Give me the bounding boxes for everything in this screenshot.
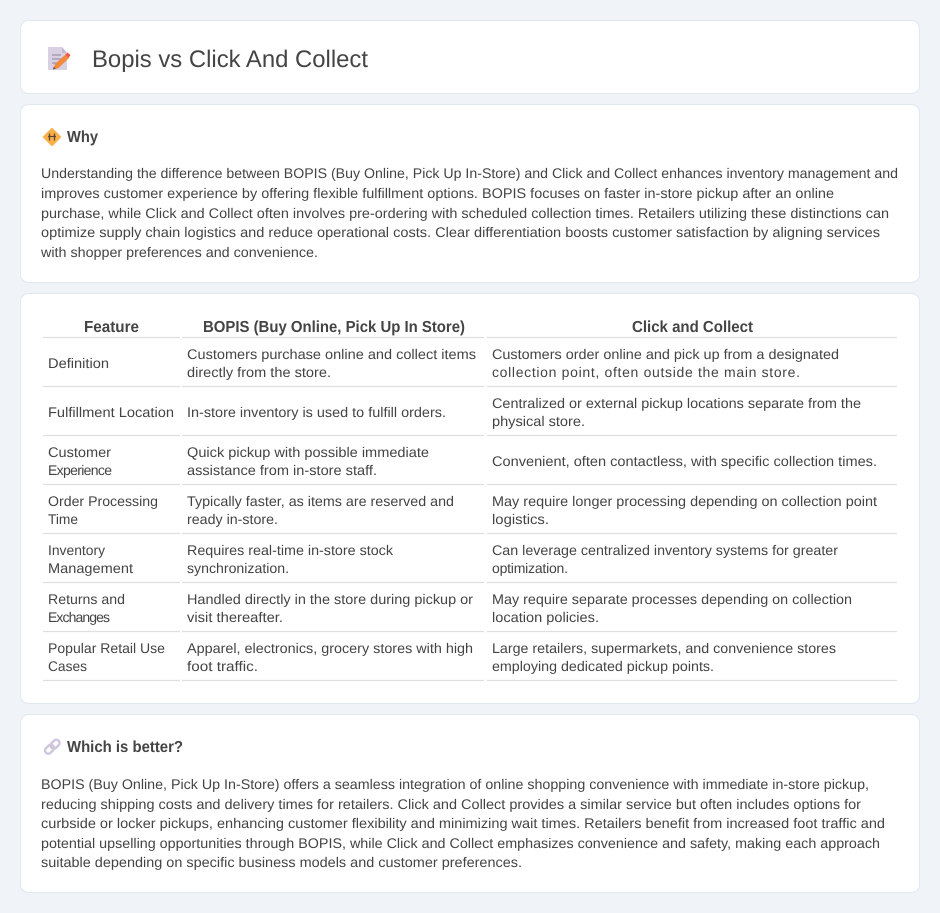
row: definition: collection point, often outside the main store. (492, 364, 800, 380)
row: definition: directly from the store. (187, 364, 331, 380)
row: inventory management: optimization. (492, 560, 568, 576)
row: inventory management (48, 542, 838, 576)
row: fulfillment location (48, 395, 861, 429)
row: definition: Customers purchase online and collect items (187, 346, 476, 362)
row: inventory management: Inventory (48, 542, 105, 558)
row: order processing time: May require longer processing depending on collection point (492, 493, 877, 509)
heading: why: Why (67, 129, 98, 146)
row: order processing time: Order Processing (48, 493, 158, 509)
row: definition: Definition (48, 355, 109, 371)
row: customer experience: Convenient, often contactless, with specific collection times. (492, 453, 877, 469)
text block: why paragraph: purchase, while Click and Collect often involves pre-ordering with scheduled collection times. Retailers utilizing these distinctions can (41, 205, 889, 221)
text block: which is better paragraph (41, 776, 885, 870)
row: order processing time: ready in-store. (187, 511, 278, 527)
row: order processing time: Typically faster, as items are reserved and (187, 493, 454, 509)
row: definition: Customers order online and pick up from a designated (492, 346, 839, 362)
text block: which is better paragraph: curbside or locker pickups, enhancing customer flexibility and minimizing wait times. Retailers benefit from increased foot traffic and (41, 815, 885, 831)
row: returns and exchanges (48, 591, 852, 625)
text block: why paragraph: optimize supply chain logistics and reduce operational costs. Clear differentiation boosts customer satisfaction by aligning services (41, 224, 880, 240)
text block: which is better paragraph: potential upselling opportunities through BOPIS, while Click and Collect emphasizes convenience and safety, making each approach (41, 835, 880, 851)
heading: which is better: Which is better? (67, 739, 183, 756)
row: returns and exchanges: visit thereafter. (187, 609, 283, 625)
text block: why paragraph: Understanding the difference between BOPIS (Buy Online, Pick Up In-Store) and Click and Collect enhances inventory management and (41, 165, 898, 181)
row: popular retail use cases: Popular Retail Use (48, 640, 165, 656)
text block: why paragraph: improves customer experience by offering flexible fulfillment options. BOPIS focuses on faster in-store pickup after an online (41, 185, 834, 201)
row: order processing time: Time (48, 511, 78, 527)
row: order processing time: logistics. (492, 511, 549, 527)
row: popular retail use cases: Cases (48, 658, 87, 674)
row: returns and exchanges: May require separate processes depending on collection (492, 591, 852, 607)
row: customer experience: Quick pickup with possible immediate (187, 444, 429, 460)
panel: header (20, 20, 920, 94)
row: fulfillment location: Centralized or external pickup locations separate from the (492, 395, 861, 411)
row: fulfillment location: In-store inventory is used to fulfill orders. (187, 404, 446, 420)
row: customer experience: assistance from in-store staff. (187, 462, 377, 478)
row: order processing time (48, 493, 877, 527)
row: inventory management: Management (48, 560, 133, 576)
text block: why paragraph (40, 165, 898, 260)
title: Bopis vs Click And Collect (92, 46, 368, 73)
panel: comparison table (20, 294, 920, 704)
row: inventory management: Requires real-time in-store stock (187, 542, 394, 558)
text block: why paragraph: with shopper preferences and convenience. (40, 244, 318, 260)
icon: link (44, 738, 61, 755)
text block: which is better paragraph: reducing shipping costs and delivery times for retailers. Click and Collect provides a similar service but often includes options for (41, 796, 861, 812)
row: customer experience: Experience (48, 462, 112, 478)
row: returns and exchanges: location policies. (492, 609, 599, 625)
row: customer experience: Customer (48, 444, 111, 460)
table header row: Click and Collect (632, 319, 754, 336)
table header row (84, 319, 754, 336)
row: popular retail use cases: foot traffic. (187, 658, 258, 674)
text block: which is better paragraph: suitable depending on specific business models and customer preferences. (41, 854, 522, 870)
table header row: BOPIS (Buy Online, Pick Up In Store) (203, 319, 465, 336)
panel: which is better (20, 714, 920, 892)
panel: why (20, 104, 920, 282)
row: popular retail use cases: Apparel, electronics, grocery stores with high (187, 640, 473, 656)
row: popular retail use cases (48, 640, 836, 674)
icon: warning diamond (44, 128, 60, 146)
row: definition (48, 346, 839, 380)
row: popular retail use cases: Large retailers, supermarkets, and convenience stores (492, 640, 836, 656)
icon: memo with pencil (48, 47, 70, 70)
row: inventory management: Can leverage centralized inventory systems for greater (492, 542, 838, 558)
row: customer experience (48, 444, 877, 478)
row: fulfillment location: physical store. (492, 413, 585, 429)
row: popular retail use cases: employing dedicated pickup points. (492, 658, 714, 674)
row: inventory management: synchronization. (187, 560, 289, 576)
row: returns and exchanges: Exchanges (48, 609, 110, 625)
table header row: Feature (84, 319, 139, 336)
row: returns and exchanges: Returns and (48, 591, 125, 607)
row: returns and exchanges: Handled directly in the store during pickup or (187, 591, 473, 607)
row: fulfillment location: Fulfillment Location (48, 404, 174, 420)
text block: which is better paragraph: BOPIS (Buy Online, Pick Up In-Store) offers a seamless integration of online shopping convenience with immediate in-store pickup, (41, 776, 869, 792)
